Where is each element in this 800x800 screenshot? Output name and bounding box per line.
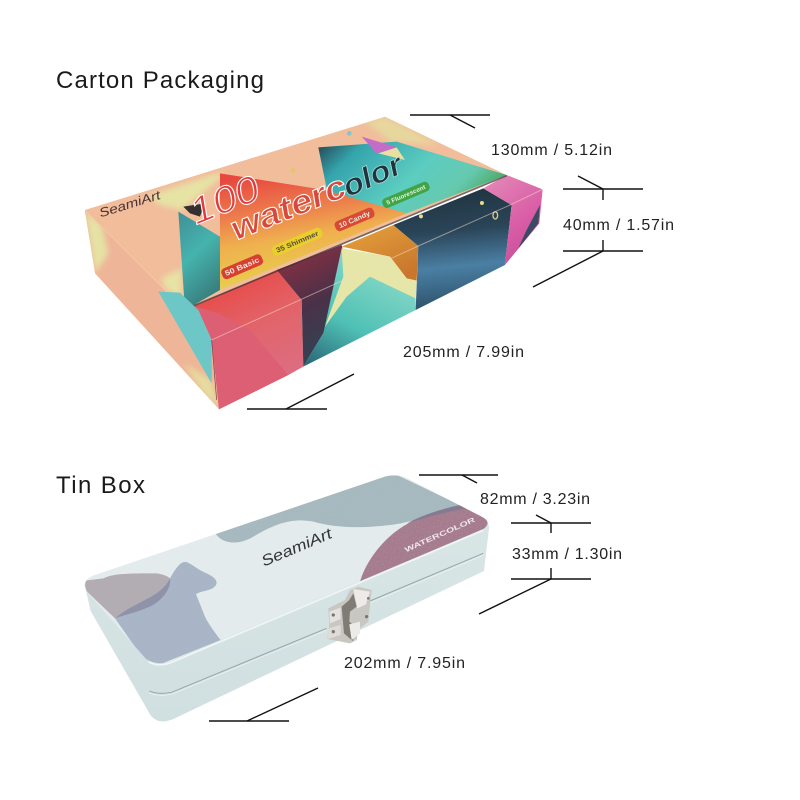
carton left side face <box>85 210 219 412</box>
left teal triangle on side <box>158 292 212 383</box>
dimension lines: tin height <box>479 515 591 614</box>
latch hasp shadow <box>342 593 357 641</box>
left teal triangle on lid <box>178 212 220 310</box>
dimension label: 82mm: 82mm / 3.23in <box>480 491 590 508</box>
tag: 10 Candy: 10 Candy <box>338 210 372 230</box>
dimension label: 205mm: 205mm / 7.99in <box>403 344 524 361</box>
product word ending olor: olor <box>338 147 410 204</box>
corner dark line <box>212 340 217 400</box>
WATERCOLOR label: WATERCOLOR <box>404 517 476 554</box>
dimension lines: carton length <box>247 374 354 409</box>
blue dot <box>347 131 352 136</box>
lid shadow seam <box>183 176 507 310</box>
magenta small triangle <box>362 137 398 153</box>
dimension lines: carton depth <box>410 115 490 128</box>
front panel: cream <box>325 248 417 327</box>
tin body <box>85 475 489 721</box>
front panel: red facet <box>197 307 288 409</box>
tag: 35 Shimmer <box>272 228 323 256</box>
lid seam <box>149 553 483 695</box>
carton brand logo: SeamiArt <box>97 188 163 220</box>
dimension lines: carton height <box>533 176 643 287</box>
heading: Tin Box: Tin Box <box>56 472 145 499</box>
front panel: red <box>185 270 303 409</box>
product number 100: 100 <box>183 167 266 232</box>
front panel: teal <box>303 248 416 367</box>
metal latch <box>327 587 372 643</box>
tag: 50 Basic <box>221 254 264 280</box>
dimension lines: tin depth <box>419 475 498 483</box>
yellow dot <box>291 168 295 172</box>
product word water: waterc <box>225 168 352 248</box>
carton top face <box>85 117 507 310</box>
tin brand logo: SeamiArt <box>259 525 335 570</box>
front panel: dark corner <box>518 205 540 248</box>
tag: 50 Basic: 50 Basic <box>223 255 261 278</box>
tag: 10 Candy <box>334 208 374 232</box>
red and yellow triangle on lid <box>220 173 407 290</box>
latch hinge highlight <box>353 589 370 608</box>
dimension label: 130mm: 130mm / 5.12in <box>491 142 612 159</box>
front edge highlight <box>148 530 483 665</box>
grey blob <box>215 472 463 543</box>
latch plate <box>327 587 372 643</box>
front panel: pink <box>483 175 543 265</box>
heading: Carton Packaging: Carton Packaging <box>56 67 264 94</box>
dimension lines: tin length <box>209 688 318 721</box>
latch screws <box>332 597 370 633</box>
front panel: navy <box>393 188 512 310</box>
front panel: maroon <box>277 245 348 367</box>
carton box photo <box>85 117 543 412</box>
dimension label: 40mm: 40mm / 1.57in <box>563 217 674 234</box>
brown blob <box>77 573 170 618</box>
latch left plates <box>329 608 341 623</box>
tag: 35 Shimmer: 35 Shimmer <box>275 230 320 255</box>
dimension label: 202mm: 202mm / 7.95in <box>344 655 465 672</box>
tag: 5 Fluorescent <box>382 182 430 208</box>
teal triangle on lid <box>318 142 507 213</box>
dimension label: 33mm: 33mm / 1.30in <box>512 546 622 563</box>
blob overlap <box>115 578 170 618</box>
front panel: orange <box>342 225 418 281</box>
latch hasp light <box>349 622 360 640</box>
lid crease highlight <box>212 189 543 340</box>
tin lid top face <box>85 476 488 664</box>
overlap stripe <box>407 505 467 523</box>
tin box photo <box>84 475 489 722</box>
dark accent <box>183 204 202 217</box>
mauve blob <box>360 506 497 582</box>
gold dots <box>419 201 498 219</box>
cream small triangle <box>378 147 405 160</box>
horse blob <box>115 562 221 668</box>
tag: 5 Fluorescent: 5 Fluorescent <box>386 185 427 207</box>
